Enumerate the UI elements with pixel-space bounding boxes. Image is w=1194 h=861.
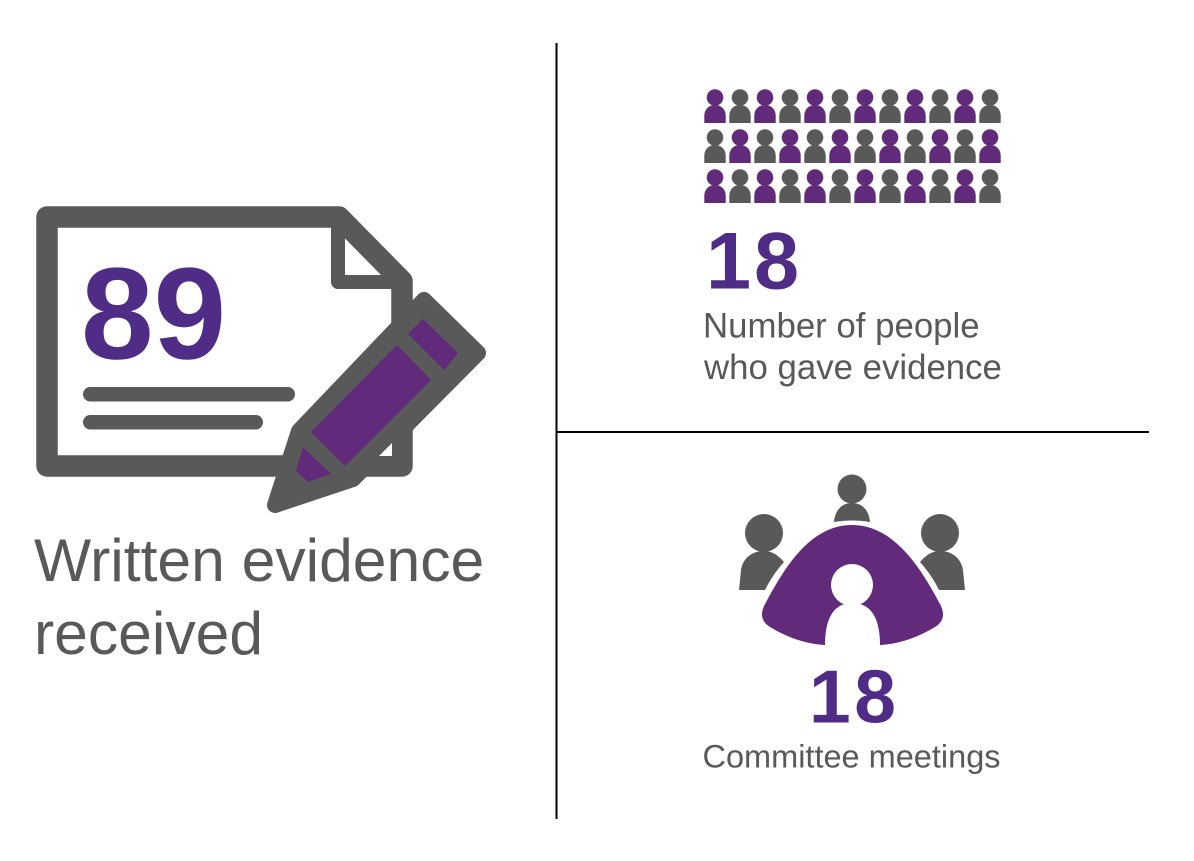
icon: document xyxy=(47,217,402,466)
label: number of people who gave evidence: who gave evidence xyxy=(703,348,1002,387)
icon: pencil xyxy=(275,300,478,505)
panel: people who gave evidence xyxy=(703,89,1002,387)
label: written evidence received xyxy=(34,526,484,667)
horizontal divider xyxy=(556,431,1149,433)
label: written evidence received: Written evidence xyxy=(34,526,484,594)
label: written evidence received: received xyxy=(34,599,263,667)
number: 89: 89 xyxy=(81,240,226,386)
label: number of people who gave evidence xyxy=(703,306,1002,387)
number: 18 people: 18 xyxy=(706,216,799,306)
panel: written evidence xyxy=(34,217,484,667)
icon: meeting table xyxy=(739,474,965,645)
vertical divider xyxy=(556,43,558,819)
panel: committee meetings xyxy=(702,474,1001,774)
label: number of people who gave evidence: Number of people xyxy=(703,306,980,346)
number: 18 meetings: 18 xyxy=(809,654,896,738)
icon: grid of people xyxy=(704,89,1001,203)
label: committee meetings: Committee meetings xyxy=(702,738,1001,774)
